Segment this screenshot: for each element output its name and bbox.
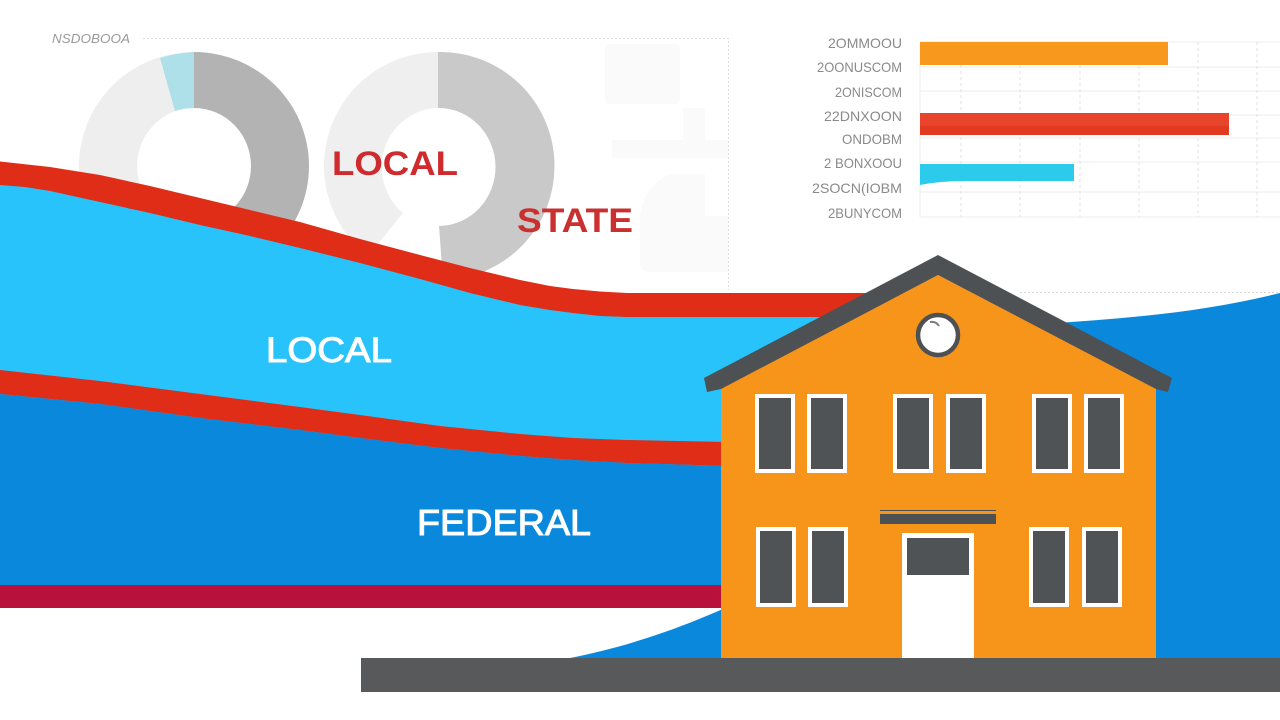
icon: school building (704, 255, 1172, 658)
donut chart 1 (79, 52, 309, 280)
axis labels: ONDOBM (842, 131, 902, 147)
label: federal: FEDERAL (417, 502, 591, 543)
axis labels: 22DNXOON (824, 108, 902, 124)
label: state: STATE (517, 202, 633, 240)
upper windows (757, 396, 1122, 471)
roof (704, 255, 1172, 392)
door lintel (880, 510, 996, 524)
faint dotted divider, right (1020, 292, 1280, 294)
stream: local cyan area (0, 185, 880, 470)
stream: state red band (0, 162, 880, 460)
bar: cyan (920, 164, 1074, 185)
axis labels: 2OMMOOU (828, 35, 902, 51)
stream: federal blue area (0, 394, 730, 590)
bar: orange (920, 42, 1168, 65)
axis labels: 2SOCN(IOBM (812, 180, 902, 196)
bar: red (920, 113, 1229, 135)
faint background shapes (605, 44, 728, 272)
stream: second red band (0, 370, 730, 466)
axis labels: 2 BONXOOU (824, 155, 902, 171)
panel: donut charts (52, 31, 728, 290)
axis labels: 2ONISCOM (835, 84, 902, 100)
axis labels: 2OONUSCOM (817, 59, 902, 75)
ground strip (361, 658, 1280, 692)
lower windows (758, 529, 1120, 605)
label: local (stream): LOCAL (266, 331, 392, 370)
panel heading: NSDOBOOA (52, 31, 130, 46)
axis labels: 2BUNYCOM (828, 205, 902, 221)
background blue swoosh: bottom (570, 608, 725, 658)
label: local: LOCAL (332, 145, 458, 183)
axis labels (812, 35, 902, 221)
panel: bar chart (812, 35, 1280, 221)
clock (918, 315, 958, 355)
stream: crimson band (0, 585, 730, 608)
door (902, 533, 974, 658)
background blue swoosh: right (1040, 293, 1280, 658)
building body (721, 275, 1156, 658)
donut chart 2 (324, 52, 555, 280)
